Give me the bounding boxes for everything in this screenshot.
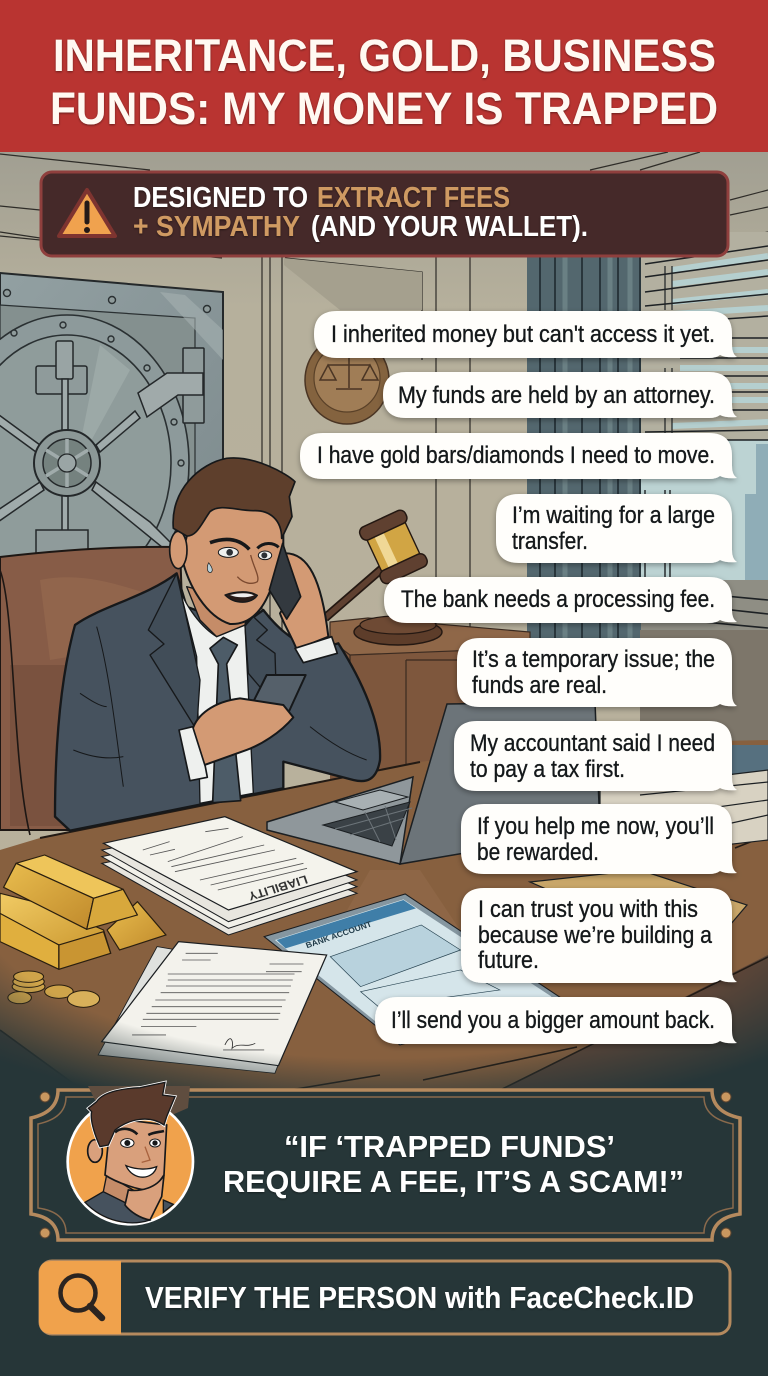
bubble 7: [454, 721, 737, 791]
title text: FUNDS: MY MONEY IS TRAPPED: [50, 83, 718, 134]
inheritance document stack: LIABILITY: [246, 872, 309, 903]
bubble 3: I have gold bars/diamonds I need to move.: [317, 442, 715, 469]
bubble 7: My accountant said I need: [470, 730, 715, 757]
tie: [210, 637, 241, 803]
raised cuff: [295, 637, 337, 663]
bubble 9: [461, 888, 737, 983]
wall medallion with scales: [305, 336, 389, 424]
icon: tablet bank account: [264, 894, 564, 1045]
bubble 9: because we’re building a: [478, 922, 713, 949]
avatar shirt: [85, 1192, 173, 1223]
background: office scene: [0, 152, 768, 1100]
callout panel: [31, 1082, 740, 1240]
title text: [50, 30, 718, 134]
raised hand: [280, 553, 328, 649]
gavel and sideboard: [325, 508, 530, 790]
paper documents, gold bars, tablet: [0, 817, 564, 1073]
warning text: EXTRACT FEES: [317, 182, 510, 214]
bubble 10: I’ll send you a bigger amount back.: [391, 1007, 715, 1034]
bubble 8: If you help me now, you’ll: [477, 813, 714, 840]
title banner: [0, 0, 768, 152]
face: [182, 497, 283, 624]
bubble 2: [383, 372, 737, 418]
avatar hand on chin: [125, 1175, 164, 1220]
lapels: [148, 573, 200, 730]
window blinds: [641, 232, 768, 445]
gold coins: [8, 971, 100, 1007]
ceiling mouldings: [0, 152, 768, 640]
icon: tablet bank account: BANK ACCOUNT: [305, 920, 373, 950]
quote text: [223, 1129, 684, 1199]
books and right desk objects: [530, 745, 768, 925]
inheritance document stack: [102, 817, 357, 935]
window glass: [640, 440, 768, 636]
bubble 6: funds are real.: [472, 672, 607, 699]
gold bars: [0, 855, 166, 969]
bottom fade: [0, 900, 768, 1376]
wall: [0, 152, 768, 932]
suit wrinkles: [73, 627, 367, 787]
hair: [173, 458, 295, 538]
vault handle: [0, 341, 204, 560]
verification bar: [39, 1261, 730, 1334]
avatar face: [105, 1118, 167, 1190]
quote text: REQUIRE A FEE, IT’S A SCAM!”: [223, 1164, 684, 1199]
bubble 9: future.: [478, 947, 539, 974]
ornate frame: [31, 1086, 740, 1240]
bubble 1: I inherited money but can't access it yet.: [331, 321, 715, 348]
avatar eyes and smile: [115, 1129, 164, 1135]
verify text: VERIFY THE PERSON with FaceCheck.ID: [145, 1280, 694, 1315]
warning banner: [41, 172, 728, 256]
bubble 1: [314, 311, 737, 358]
bubble 3: [300, 433, 737, 479]
bubble 6: It’s a temporary issue; the: [472, 646, 715, 673]
neck: [187, 587, 248, 637]
warning text: + SYMPATHY: [133, 211, 300, 243]
warning text: DESIGNED TO: [133, 182, 308, 214]
desk: [0, 740, 768, 1100]
bubble 9: I can trust you with this: [478, 896, 698, 923]
icon: magnifying glass: [39, 1261, 121, 1334]
vault wheel: [34, 430, 100, 496]
bubble 6: [457, 638, 737, 707]
bubble 5: The bank needs a processing fee.: [401, 586, 715, 613]
avatar: [68, 1082, 193, 1224]
vault: [0, 273, 223, 611]
avatar neck: [103, 1175, 133, 1203]
lower cuff: [179, 727, 207, 781]
handheld phone: [250, 675, 306, 715]
ear: [170, 531, 187, 569]
signed letter: [98, 942, 327, 1073]
lower hand: [192, 698, 293, 766]
chair: [0, 547, 190, 830]
worried eyes and brows: [207, 539, 279, 602]
right wall shadow: [640, 630, 768, 750]
bubble 4: transfer.: [512, 528, 588, 555]
bubble 4: [496, 494, 737, 563]
curtain: [527, 256, 641, 676]
quote text: “IF ‘TRAPPED FUNDS’: [284, 1129, 615, 1164]
bubble 7: to pay a tax first.: [470, 756, 625, 783]
shirt: [177, 577, 253, 803]
bubble 8: [461, 804, 737, 874]
bubble 5: [384, 577, 737, 623]
speech bubbles: [300, 311, 737, 1044]
phone at ear: [269, 543, 301, 619]
suit: [55, 573, 380, 831]
icon: warning triangle: [59, 190, 115, 236]
warning text: (AND YOUR WALLET).: [311, 211, 588, 243]
title text: INHERITANCE, GOLD, BUSINESS: [53, 30, 716, 81]
avatar hair: [88, 1082, 175, 1147]
character: worried man on phone: [55, 458, 380, 831]
bubble 2: My funds are held by an attorney.: [398, 382, 715, 409]
door panel shading: [284, 258, 422, 310]
bubble 10: [375, 997, 737, 1044]
bubble 8: be rewarded.: [477, 839, 599, 866]
laptop: [267, 702, 600, 864]
warning text: [133, 182, 588, 243]
bubble 4: I’m waiting for a large: [512, 502, 715, 529]
